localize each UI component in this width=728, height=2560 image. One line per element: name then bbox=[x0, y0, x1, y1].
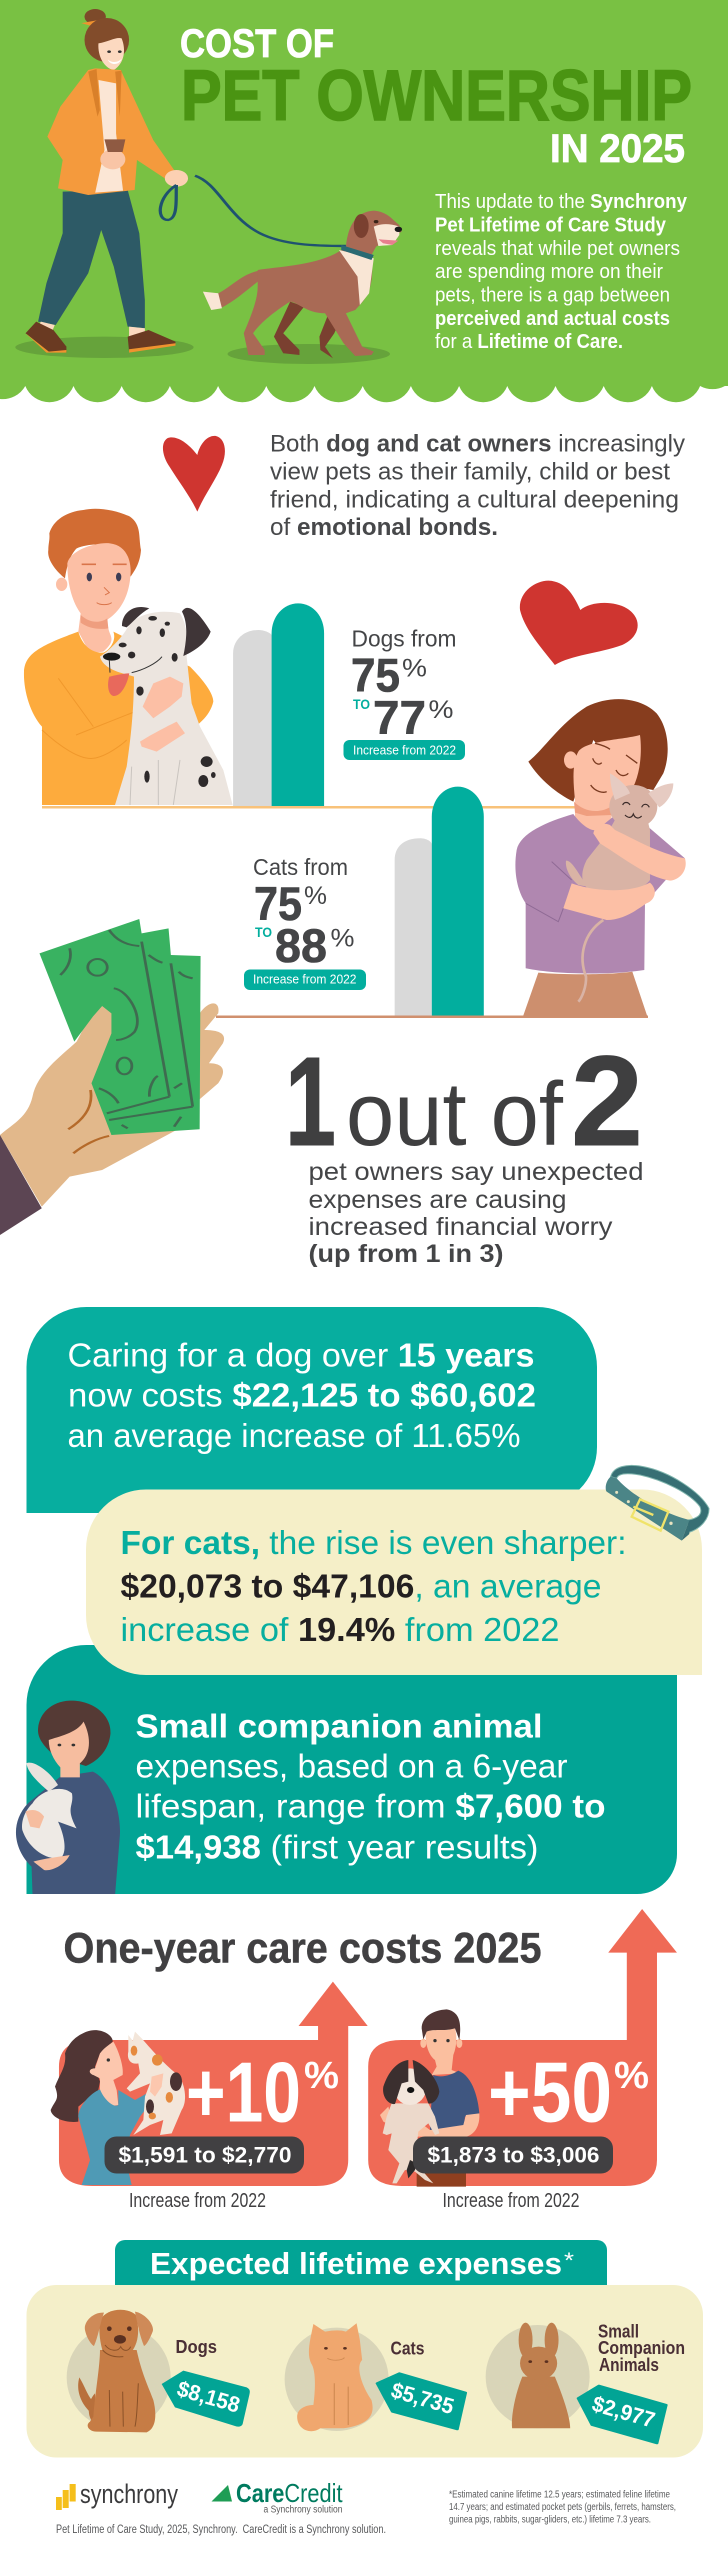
title: IN 2025 bbox=[550, 127, 685, 171]
caption: increase cats: Increase from 2022 bbox=[129, 2190, 266, 2212]
price tag: cats bbox=[377, 2373, 466, 2429]
badge: cats increase from 2022: Increase from 2022 bbox=[253, 972, 356, 986]
teal card bbox=[26, 1307, 597, 1513]
price tag: dogs bbox=[162, 2371, 250, 2427]
stat: cats 75 to 88 percent: % bbox=[304, 882, 327, 910]
text: worry statement: (up from 1 in 3) bbox=[308, 1240, 504, 1268]
chart: dogs bars bbox=[233, 603, 324, 807]
text: cat costs: For cats, the rise is even sharper: bbox=[120, 1524, 626, 1561]
arrow card: cats plus 10 percent bbox=[59, 1982, 368, 2186]
stat: cats 75 to 88 percent: 75 bbox=[254, 877, 302, 930]
text: small companion costs: expenses, based on a 6-year bbox=[136, 1748, 568, 1784]
stat: 1 out of 2 bbox=[285, 1030, 643, 1173]
text: emotional bonds statement bbox=[270, 430, 685, 541]
footnote: guinea pigs, rabbits, sugar-gliders, etc.) lifetime 7.3 years. bbox=[449, 2514, 651, 2526]
heading tab bbox=[115, 2240, 607, 2285]
text: dog costs bbox=[68, 1336, 536, 1454]
text: small companion costs: lifespan, range from $7,600 to bbox=[136, 1788, 606, 1824]
intro text: are spending more on their bbox=[435, 261, 663, 283]
panel: financial worry bbox=[0, 919, 644, 1268]
stat: dogs 75 to 77 percent: % bbox=[428, 696, 454, 724]
stat: cats 75 to 88 percent bbox=[253, 854, 354, 972]
title: COST OF bbox=[180, 22, 334, 66]
panel: emotional bonds bbox=[24, 430, 686, 1018]
intro text: Pet Lifetime of Care Study bbox=[435, 214, 667, 236]
label: dogs: Dogs bbox=[176, 2337, 217, 2357]
heading tab: Expected lifetime expenses bbox=[150, 2246, 562, 2281]
text: worry statement bbox=[308, 1158, 644, 1268]
intro text: pets, there is a gap between bbox=[435, 284, 670, 306]
illustration: hand holding money bbox=[0, 919, 224, 1235]
text: dog costs: an average increase of 11.65% bbox=[68, 1417, 520, 1454]
heading: One-year care costs 2025 bbox=[64, 1924, 542, 1972]
logo: CareCredit: a Synchrony solution bbox=[264, 2504, 342, 2516]
logo: synchrony: synchrony bbox=[80, 2479, 178, 2509]
arrow card: dogs plus 50 percent bbox=[368, 1909, 677, 2186]
text: worry statement: increased financial worry bbox=[308, 1213, 613, 1241]
icon: pet collar bbox=[606, 1465, 709, 1541]
header background with scalloped edge bbox=[0, 0, 728, 402]
baseline: cats bbox=[216, 1016, 648, 1018]
illustration: woman with cat bbox=[51, 2030, 185, 2185]
icon: heart right bbox=[520, 581, 638, 665]
intro text: for a Lifetime of Care. bbox=[435, 331, 623, 353]
stat: plus 10 percent: % bbox=[304, 2055, 339, 2097]
illustration: cat bbox=[285, 2323, 389, 2431]
stat: cats 75 to 88 percent: % bbox=[330, 924, 354, 952]
panel: cat lifetime cost bbox=[86, 1465, 709, 1675]
stat: dogs 75 to 77 percent: 75 bbox=[351, 648, 400, 702]
badge: cats increase from 2022 bbox=[244, 970, 366, 990]
panel: one-year care costs bbox=[51, 1909, 677, 2212]
stat: 1 out of 2: 2 bbox=[571, 1030, 643, 1173]
stat: cats 75 to 88 percent: Cats from bbox=[253, 854, 348, 880]
footer bbox=[56, 2478, 676, 2536]
stat: dogs 75 to 77 percent bbox=[351, 626, 456, 744]
logo: synchrony bbox=[56, 2479, 178, 2510]
caption: increase dogs: Increase from 2022 bbox=[442, 2190, 580, 2212]
logo: CareCredit bbox=[212, 2478, 343, 2516]
stat: cats 75 to 88 percent: TO bbox=[255, 924, 272, 940]
stat: plus 50 percent: % bbox=[614, 2055, 649, 2097]
text: dog costs: Caring for a dog over 15 years bbox=[68, 1336, 534, 1374]
chart: cats bars bbox=[395, 787, 484, 1017]
label: small companion animals: Small bbox=[598, 2322, 639, 2342]
stat: dogs 75 to 77 percent: Dogs from bbox=[352, 626, 456, 652]
text: small companion costs: Small companion animal bbox=[136, 1708, 542, 1744]
stat: dogs 75 to 77 percent: 77 bbox=[373, 691, 426, 744]
intro text: reveals that while pet owners bbox=[435, 238, 680, 260]
text: emotional bonds statement: view pets as their family, child or best bbox=[270, 458, 670, 486]
stat: dogs 75 to 77 percent: % bbox=[402, 654, 427, 682]
intro text: This update to the Synchrony bbox=[435, 191, 688, 213]
illustration: man hugging dalmatian bbox=[24, 509, 233, 805]
stat: plus 50 percent: +50 bbox=[488, 2046, 612, 2140]
label: small companion animals: Companion bbox=[598, 2338, 685, 2358]
source note: Pet Lifetime of Care Study, 2025, Synchrony. CareCredit is a Synchrony solution. bbox=[56, 2524, 386, 2536]
stat: 1 out of 2: 1 bbox=[285, 1031, 336, 1172]
text: emotional bonds statement: of emotional bonds. bbox=[270, 514, 498, 541]
icon: heart left bbox=[163, 436, 225, 512]
illustration: man with dog bbox=[380, 2009, 479, 2187]
stat: plus 10 percent: +10 bbox=[186, 2046, 301, 2140]
teal card bbox=[26, 1645, 677, 1894]
price tag: dogs: $8,158 bbox=[174, 2376, 243, 2418]
text: cat costs: $20,073 to $47,106, an average bbox=[120, 1568, 602, 1604]
stat: cats 75 to 88 percent: 88 bbox=[275, 919, 327, 972]
text: cat costs bbox=[120, 1524, 626, 1648]
title bbox=[180, 22, 692, 171]
illustration: dog bbox=[67, 2310, 171, 2432]
panel: dog lifetime cost bbox=[26, 1307, 597, 1513]
label: small companion animals: Animals bbox=[599, 2355, 659, 2375]
text: small companion costs: $14,938 (first year results) bbox=[136, 1828, 538, 1866]
footnote: *Estimated canine lifetime 12.5 years; estimated feline lifetime bbox=[449, 2490, 670, 2500]
heading tab: * bbox=[564, 2248, 575, 2273]
badge: dogs increase from 2022 bbox=[344, 740, 465, 760]
label: cats: Cats bbox=[390, 2338, 424, 2358]
footnote bbox=[449, 2490, 676, 2526]
price tag: small animals bbox=[578, 2386, 666, 2443]
text: emotional bonds statement: friend, indicating a cultural deepening bbox=[270, 486, 679, 514]
label: small companion animals bbox=[598, 2322, 685, 2375]
panel: small companion animal bbox=[16, 1645, 677, 1894]
badge: cost range dogs bbox=[413, 2136, 613, 2174]
illustration: person with rabbit bbox=[16, 1701, 120, 1894]
badge: cost range dogs: $1,873 to $3,006 bbox=[428, 2142, 600, 2168]
cream card bbox=[86, 1490, 702, 1675]
price tag: small animals: $2,977 bbox=[589, 2391, 658, 2433]
price tag: cats: $5,735 bbox=[388, 2377, 457, 2419]
stat: dogs 75 to 77 percent: TO bbox=[353, 696, 370, 712]
badge: dogs increase from 2022: Increase from 2022 bbox=[353, 742, 456, 758]
panel: green header bbox=[0, 0, 728, 402]
text: cat costs: increase of 19.4% from 2022 bbox=[120, 1611, 560, 1648]
text: worry statement: pet owners say unexpected bbox=[308, 1158, 644, 1186]
intro text: perceived and actual costs bbox=[435, 308, 670, 330]
logo: CareCredit: CareCredit bbox=[236, 2478, 343, 2508]
text: emotional bonds statement: Both dog and cat owners increasingly bbox=[270, 430, 685, 458]
illustration: rabbit bbox=[486, 2323, 590, 2428]
cream card bbox=[26, 2285, 703, 2458]
panel: expected lifetime expenses bbox=[26, 2240, 703, 2458]
intro text bbox=[435, 191, 688, 353]
text: worry statement: expenses are causing bbox=[308, 1186, 566, 1214]
badge: cost range cats: $1,591 to $2,770 bbox=[118, 2142, 292, 2168]
stat: 1 out of 2: out of bbox=[346, 1065, 564, 1165]
badge: cost range cats bbox=[104, 2136, 304, 2174]
text: dog costs: now costs $22,125 to $60,602 bbox=[68, 1376, 536, 1414]
text: small companion costs bbox=[136, 1708, 606, 1866]
illustration: woman hugging cat bbox=[515, 699, 686, 1017]
baseline: dogs bbox=[42, 806, 576, 808]
illustration: woman walking dog bbox=[15, 9, 402, 364]
